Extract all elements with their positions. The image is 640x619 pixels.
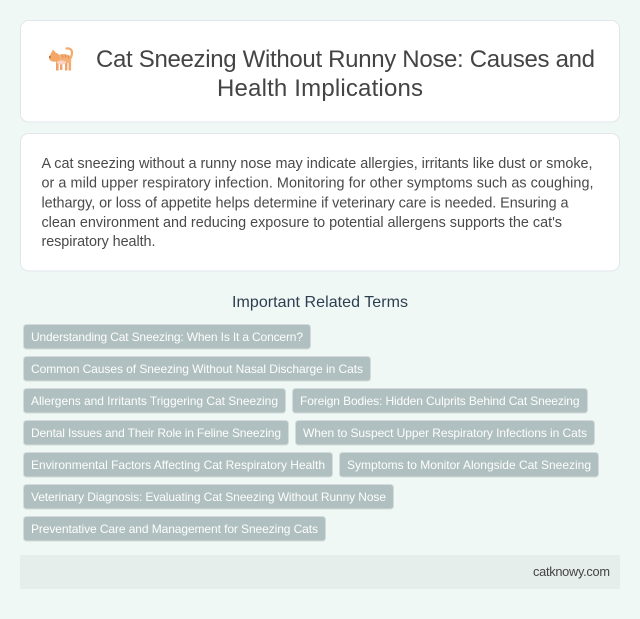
tag: allergens [24, 388, 286, 413]
tag: symptoms [340, 452, 598, 477]
panel: summary paragraph: A cat sneezing without a runny nose may indicate allergies, irritants like dust or smoke, [42, 156, 592, 172]
tag: dental issues: Dental Issues and Their Role in Feline Sneezing [31, 426, 281, 440]
panel: summary paragraph: lethargy, or loss of appetite helps determine if veterinary care is needed. Ensuring a [42, 196, 568, 212]
heading: important related terms: Important Related Terms [232, 294, 408, 311]
icon: cat [49, 48, 72, 70]
tag: allergens: Allergens and Irritants Triggering Cat Sneezing [31, 394, 278, 408]
tag: understanding: Understanding Cat Sneezing: When Is It a Concern? [31, 330, 303, 344]
tag: upper respiratory: When to Suspect Upper Respiratory Infections in Cats [303, 426, 587, 440]
tag: foreign bodies: Foreign Bodies: Hidden Culprits Behind Cat Sneezing [300, 394, 580, 408]
footer [20, 555, 620, 589]
panel: summary paragraph [20, 134, 620, 271]
tag: symptoms: Symptoms to Monitor Alongside Cat Sneezing [347, 458, 591, 472]
tag: upper respiratory [296, 420, 594, 445]
related terms tags [24, 324, 598, 541]
tag: veterinary diagnosis [24, 484, 394, 509]
tag: common causes: Common Causes of Sneezing Without Nasal Discharge in Cats [31, 362, 363, 376]
panel: summary paragraph: or a mild upper respiratory infection. Monitoring for other symptoms such as coughing, [42, 176, 594, 192]
footer: catknowy.com [533, 564, 610, 579]
title: Cat Sneezing Without Runny Nose: Causes and [96, 46, 595, 73]
panel: summary paragraph: clean environment and reducing exposure to potential allergens supports the cat's [42, 215, 562, 231]
tag: foreign bodies [292, 388, 588, 413]
tag: veterinary diagnosis: Veterinary Diagnosis: Evaluating Cat Sneezing Without Runny Nose [31, 490, 386, 504]
tag: environmental: Environmental Factors Affecting Cat Respiratory Health [31, 458, 325, 472]
tag: preventative care: Preventative Care and Management for Sneezing Cats [31, 522, 318, 536]
title: Health Implications [217, 75, 423, 102]
panel: title card [20, 20, 620, 122]
tag: environmental [24, 452, 332, 477]
tag: preventative care [24, 516, 326, 541]
panel: summary paragraph: respiratory health. [42, 234, 156, 250]
tag: dental issues [24, 420, 288, 445]
title [96, 46, 595, 102]
tag: understanding [24, 324, 310, 349]
tag: common causes [24, 356, 370, 381]
